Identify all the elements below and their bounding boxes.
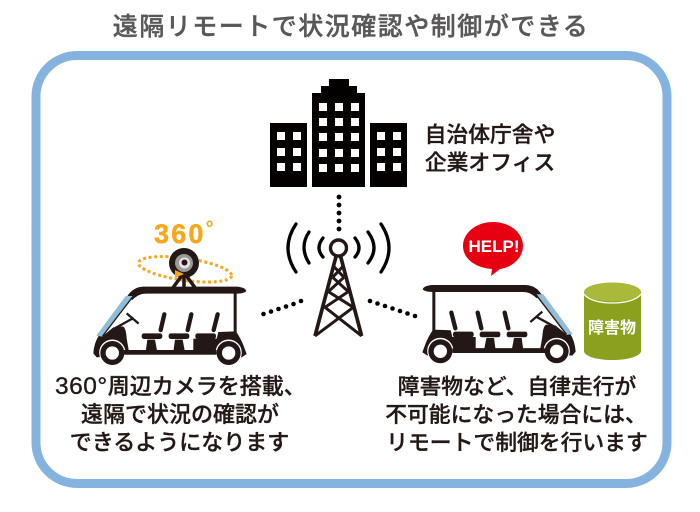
right caption: 不可能になった場合には、 [385, 402, 647, 427]
icon: obstacle drum: 障害物 [588, 318, 636, 337]
left caption: 遠隔で状況の確認が [81, 402, 279, 427]
building label: 自治体庁舎や [425, 122, 555, 147]
dotted link: car to tower [261, 299, 303, 316]
left caption: 360°周辺カメラを搭載、 [55, 373, 306, 400]
left caption: できるようになります [70, 430, 289, 455]
building label [425, 122, 555, 175]
title: 遠隔リモートで状況確認や制御ができる [113, 13, 589, 41]
icon: right autonomous car [422, 285, 576, 364]
right caption: リモートで制御を行います [386, 430, 648, 455]
icon: obstacle drum [584, 282, 641, 360]
360 degree label: ° [206, 218, 216, 240]
360 degree label: 360 [154, 219, 206, 249]
dotted link: building to tower [337, 195, 341, 231]
icon: radio tower [288, 224, 389, 336]
dotted link: tower to car [368, 299, 417, 318]
icon: HELP speech bubble [463, 222, 523, 276]
right caption: 障害物など、自律走行が [398, 374, 637, 399]
right caption [385, 374, 648, 455]
left caption [55, 373, 306, 455]
icon: 360 camera with rotation ring [137, 248, 233, 289]
icon: office buildings [270, 79, 407, 187]
icon: HELP speech bubble: HELP! [468, 237, 520, 256]
building label: 企業オフィス [425, 150, 555, 175]
icon: left autonomous car [93, 287, 247, 366]
panel: rounded blue frame [36, 56, 667, 484]
